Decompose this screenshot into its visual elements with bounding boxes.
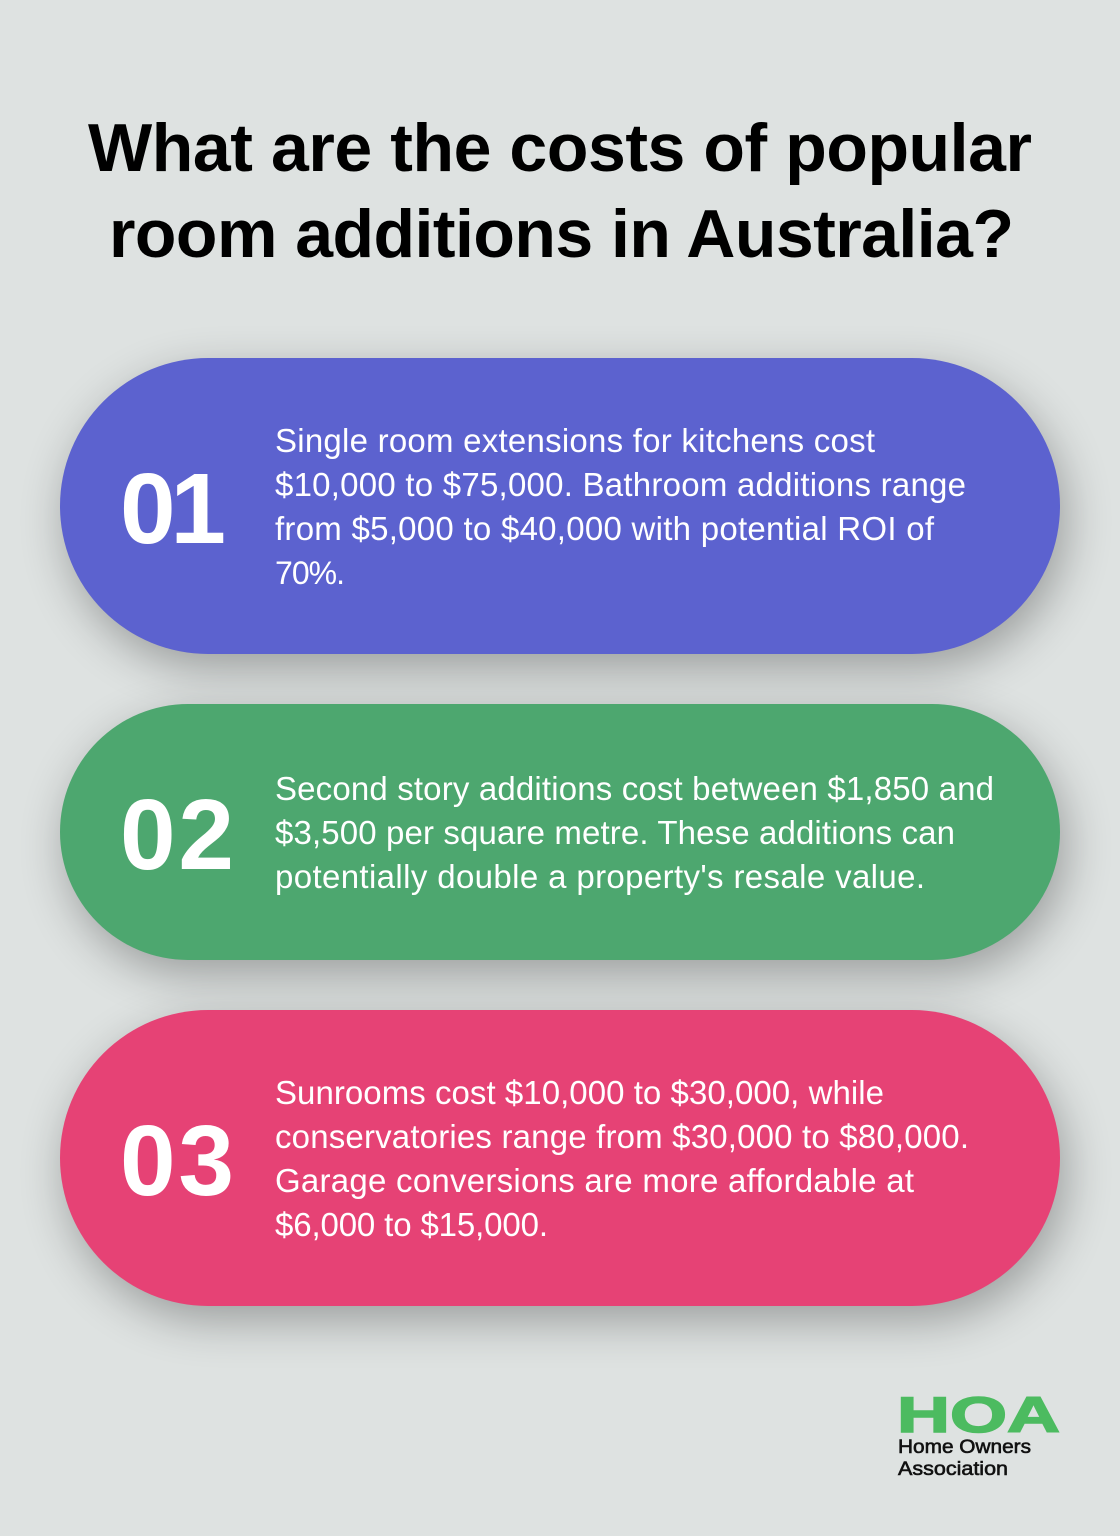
title: room additions in Australia? (109, 196, 1014, 272)
panel: card 03 background (60, 1010, 1060, 1306)
logo: Home Owners Association: Home Owners (898, 1436, 1031, 1458)
text block: card 02: potentially double a property's resale value. (275, 858, 925, 895)
text block: card 03: $6,000 to $15,000. (275, 1206, 548, 1243)
text block: card 01: $10,000 to $75,000. Bathroom additions range (275, 466, 966, 503)
text block: card 01: Single room extensions for kitchens cost (275, 422, 875, 459)
logo: Home Owners Association (897, 1387, 1060, 1480)
text block: card 03: Sunrooms cost $10,000 to $30,000, while (275, 1074, 884, 1111)
logo: Home Owners Association: Association (898, 1458, 1008, 1480)
text block: card 03: Garage conversions are more affordable at (275, 1162, 914, 1199)
title: What are the costs of popular (88, 110, 1032, 186)
number 01: 01 (120, 453, 226, 565)
text block: card 01: 70%. (275, 555, 345, 591)
text block: card 03 (275, 1074, 969, 1243)
panel: card 02 background (60, 704, 1060, 960)
panel: card 01 background (60, 358, 1060, 654)
text block: card 01 (275, 422, 966, 591)
text block: card 02 (275, 770, 994, 895)
title (88, 110, 1032, 272)
text block: card 02: $3,500 per square metre. These additions can (275, 814, 955, 851)
text block: card 01: from $5,000 to $40,000 with potential ROI of (275, 510, 935, 547)
number 03: 03 (120, 1105, 234, 1217)
logo: Home Owners Association: HOA (897, 1387, 1060, 1443)
text block: card 03: conservatories range from $30,000 to $80,000. (275, 1118, 969, 1155)
text block: card 02: Second story additions cost between $1,850 and (275, 770, 994, 807)
number 02: 02 (120, 779, 234, 891)
